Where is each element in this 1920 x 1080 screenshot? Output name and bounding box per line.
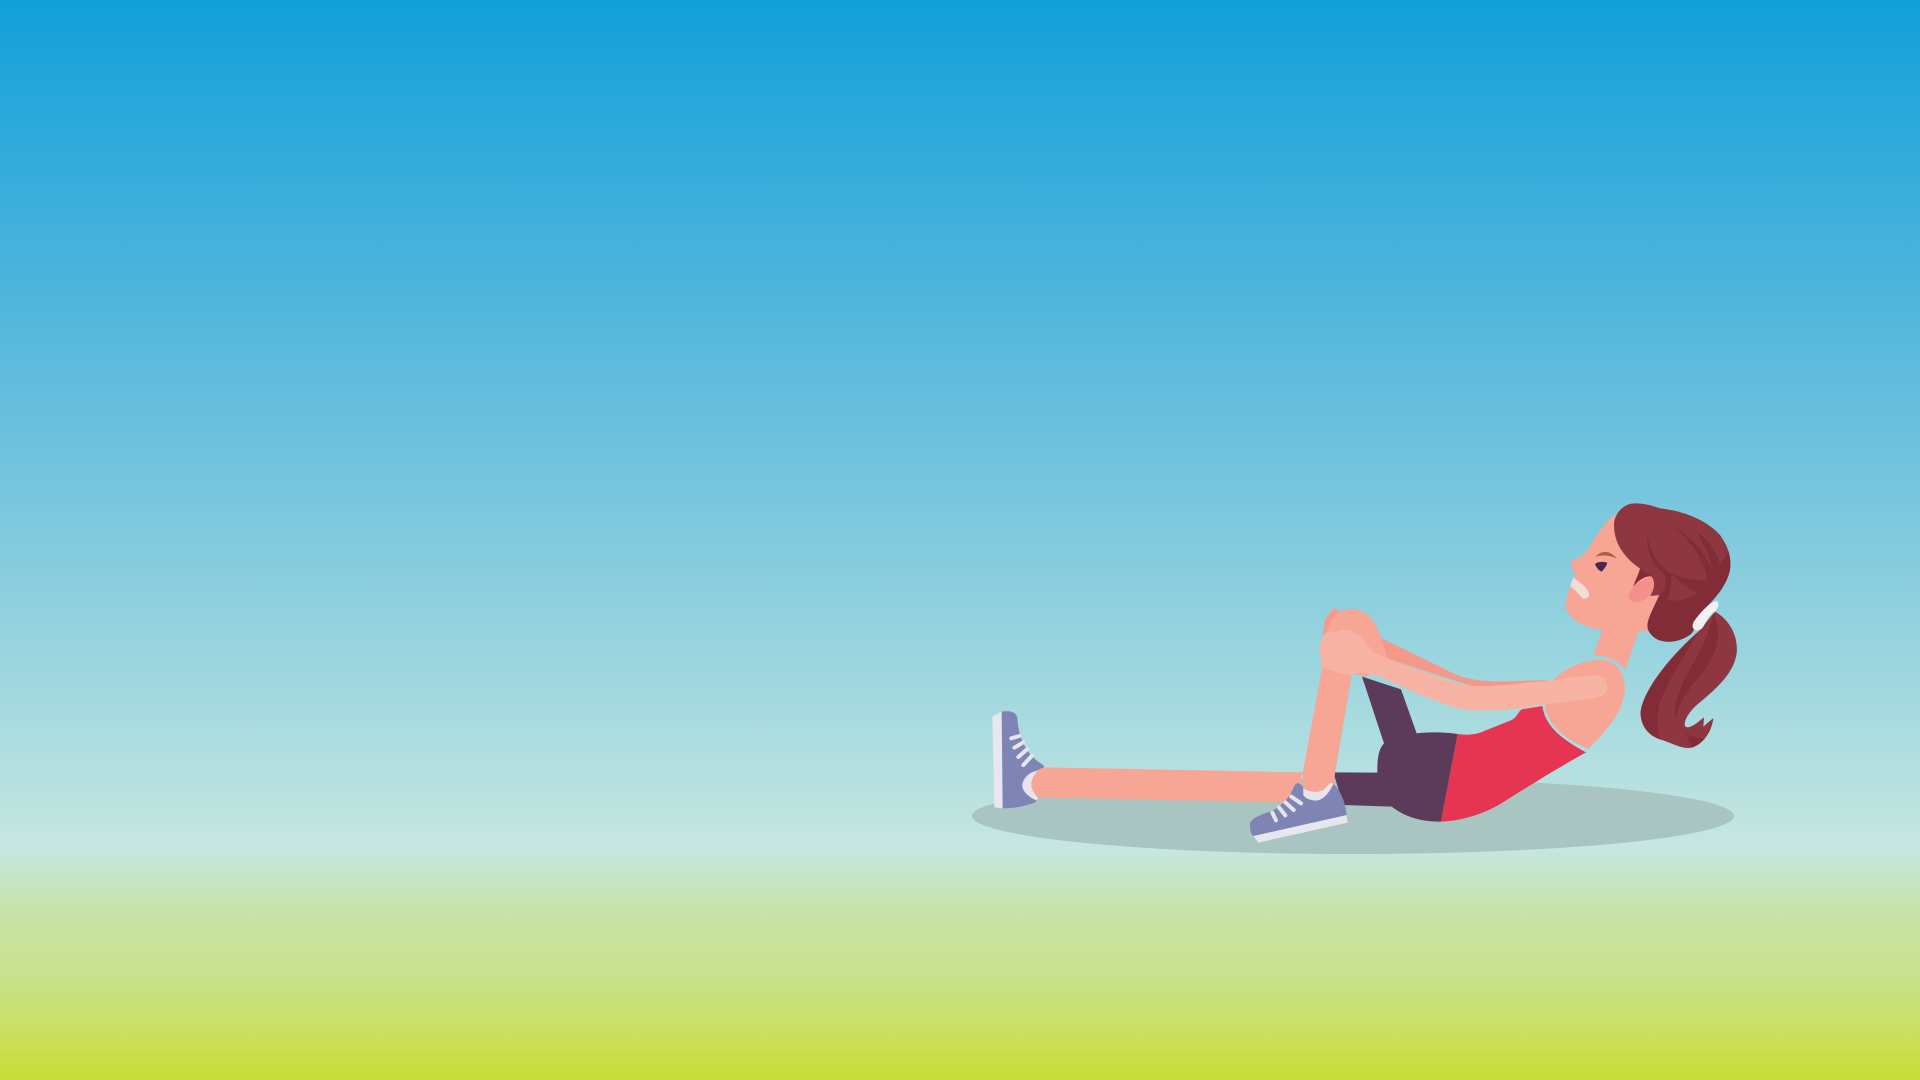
figure [992,503,1737,843]
hair tie [1693,601,1718,631]
ear [1628,577,1654,602]
face and neck [1566,514,1660,670]
shoe: extended foot [992,711,1044,808]
ponytail [1641,612,1737,748]
knee [1325,609,1387,677]
shorts [1333,677,1458,822]
mouth [1570,577,1589,599]
shoe: bent leg [1250,783,1348,843]
extended leg [1030,767,1303,803]
shoulder [1545,660,1625,749]
eyebrow [1596,552,1617,558]
head [1566,503,1730,670]
hair [1614,503,1730,642]
far hand fingers [1323,608,1341,637]
ground shadow [972,778,1734,854]
eye [1595,562,1607,572]
bent shin [1303,665,1352,797]
near arm and hand [1319,629,1607,711]
far arm [1382,638,1547,690]
red top [1441,706,1586,822]
